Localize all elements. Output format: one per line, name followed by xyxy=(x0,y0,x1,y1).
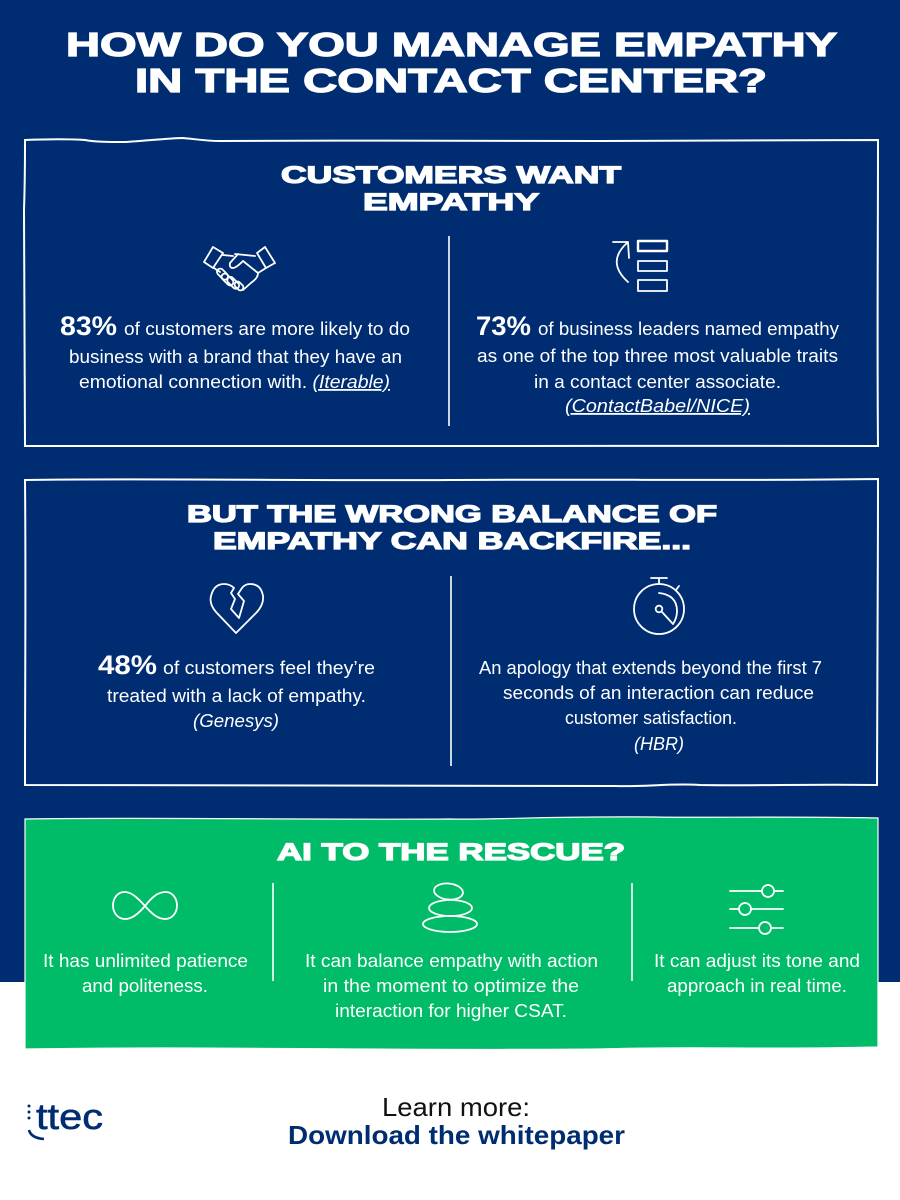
text: balance: interaction for higher CSAT. xyxy=(335,1001,567,1021)
stat: 83%: 83% xyxy=(60,311,117,341)
stat: apology: customer satisfaction. xyxy=(565,708,737,728)
panel border xyxy=(25,479,878,786)
text: balance xyxy=(305,951,598,1021)
stat: 73% xyxy=(476,311,839,416)
stat: 48%: treated with a lack of empathy. xyxy=(107,686,366,706)
green panel xyxy=(25,817,878,1049)
heading xyxy=(187,501,717,555)
stat: apology xyxy=(479,658,822,754)
heading: EMPATHY xyxy=(363,189,539,216)
title xyxy=(66,26,837,99)
stat: apology: (HBR) xyxy=(634,734,684,754)
text: tone xyxy=(654,951,860,996)
heading xyxy=(281,162,621,216)
heading: EMPATHY CAN BACKFIRE... xyxy=(213,528,691,555)
text: patience xyxy=(43,951,248,996)
icon: stopwatch xyxy=(634,578,684,634)
heading: AI TO THE RESCUE? xyxy=(277,839,625,866)
icon: reorder list xyxy=(613,241,667,291)
text: balance: It can balance empathy with action xyxy=(305,951,598,971)
text: tone: approach in real time. xyxy=(667,976,847,996)
stat: 83%: business with a brand that they have an xyxy=(69,347,402,367)
text: patience: It has unlimited patience xyxy=(43,951,248,971)
panel: customers want empathy xyxy=(24,138,878,446)
call to action: Download the whitepaper xyxy=(288,1120,625,1150)
icon: balanced stones xyxy=(423,882,477,932)
icon: infinity xyxy=(113,892,177,919)
stat: 73%: 73% xyxy=(476,311,531,341)
stat: 73%: in a contact center associate. xyxy=(534,372,781,392)
panel border xyxy=(24,138,878,446)
stat: 48%: 48% xyxy=(98,650,157,680)
stat: 73%: (ContactBabel/NICE) xyxy=(565,396,750,416)
stat: 83%: of customers are more likely to do xyxy=(124,319,410,339)
icon: handshake xyxy=(204,247,275,292)
stat: 83% xyxy=(60,311,410,392)
icon: sliders xyxy=(730,885,783,934)
call to action: Learn more: xyxy=(382,1092,530,1122)
stat: 48%: (Genesys) xyxy=(193,711,279,731)
stat: 48%: of customers feel they’re xyxy=(163,658,375,678)
heading: BUT THE WRONG BALANCE OF xyxy=(187,501,717,528)
text: tone: It can adjust its tone and xyxy=(654,951,860,971)
stat: 73%: as one of the top three most valuable traits xyxy=(477,346,838,366)
panel: wrong balance xyxy=(25,479,878,786)
title: IN THE CONTACT CENTER? xyxy=(135,62,767,99)
stat: apology: seconds of an interaction can reduce xyxy=(503,683,814,703)
stat: 48% xyxy=(98,650,375,731)
stat: 73%: of business leaders named empathy xyxy=(538,319,839,339)
text: balance: in the moment to optimize the xyxy=(323,976,579,996)
icon: broken heart xyxy=(211,584,263,633)
panel: AI to the rescue xyxy=(25,817,878,1049)
stat: apology: An apology that extends beyond the first 7 xyxy=(479,658,822,678)
text: patience: and politeness. xyxy=(82,976,208,996)
heading: CUSTOMERS WANT xyxy=(281,162,621,189)
title: HOW DO YOU MANAGE EMPATHY xyxy=(66,26,837,63)
logo: ttec: ttec xyxy=(36,1096,103,1137)
stat: 83%: emotional connection with. (Iterable) xyxy=(79,372,390,392)
call to action xyxy=(288,1092,625,1150)
